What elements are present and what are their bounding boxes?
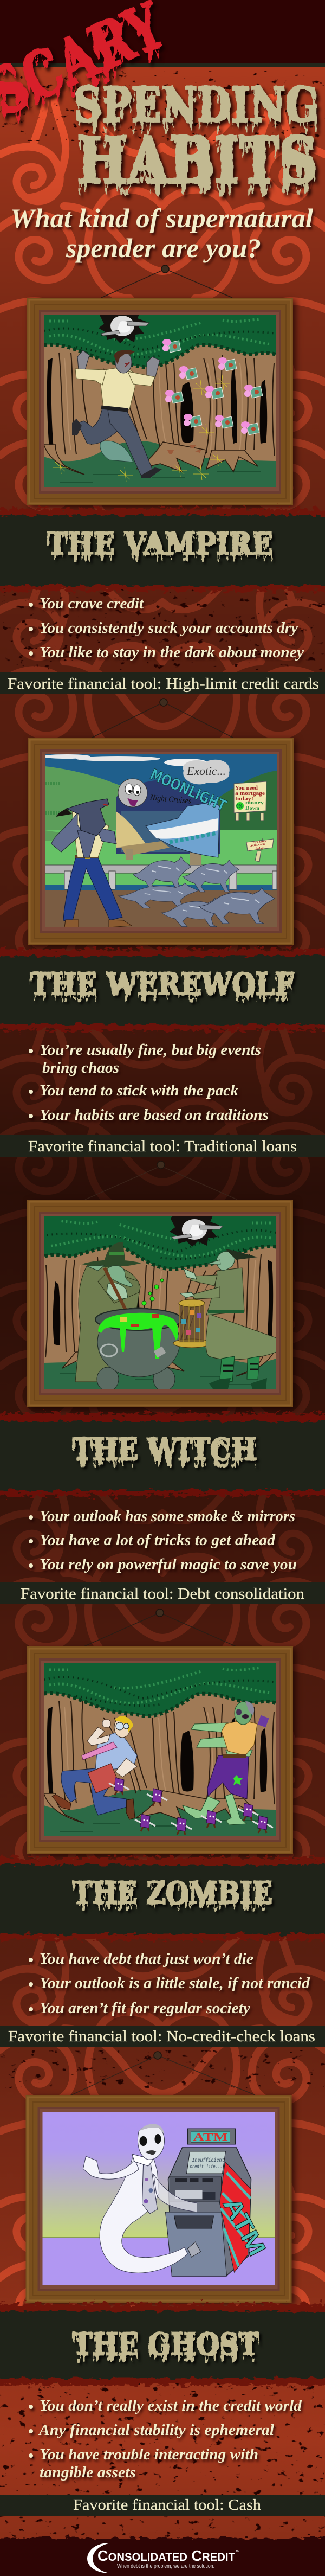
bullet list: ghost: You have trouble interacting with (40, 2446, 258, 2463)
heading: the vampire: THE VAMPIRE (47, 526, 273, 562)
card cage (173, 1299, 210, 1348)
icon: moon (170, 1213, 223, 1247)
ATM machine: Insufficient (192, 2157, 224, 2164)
subtitle: spender are you? (66, 233, 261, 263)
mushrooms (167, 445, 202, 454)
billboard: moonlight cruise (116, 760, 230, 865)
blood splatter behind band: werewolf (0, 949, 325, 1030)
bullet list: vampire: You consistently suck your accounts dry (40, 619, 298, 637)
bullet list: werewolf: bring chaos (42, 1059, 119, 1076)
bullet list: werewolf: Your habits are based on traditions (40, 1106, 269, 1124)
bullet list: witch (29, 1508, 297, 1573)
sign: mortgage: Down (245, 806, 260, 811)
ATM machine: credit life... (190, 2164, 222, 2170)
favorite tool bar: werewolf (0, 1135, 325, 1157)
favorite tool bar: ghost (0, 2495, 325, 2516)
ghost figure (83, 2124, 200, 2273)
bullet list: witch: You rely on powerful magic to save you (40, 1556, 297, 1573)
bullet list: ghost (29, 2397, 302, 2481)
sign: mortgage (234, 781, 266, 821)
favorite tool bar: witch (0, 1582, 325, 1604)
framed picture: vampire (27, 298, 293, 505)
framed picture: zombie (27, 1646, 293, 1854)
sign: mortgage: You need (235, 785, 258, 791)
blood splatter behind band: vampire (0, 509, 325, 591)
band: zombie (0, 1865, 325, 1934)
logo: Consolidated Credit (87, 2543, 239, 2573)
sign: credit card: Get a new (253, 840, 267, 844)
bullet list: zombie (29, 1950, 310, 2017)
subtitle (10, 203, 313, 263)
witch with cage (180, 1249, 276, 1389)
zombie (183, 1701, 269, 1825)
witch stirring (75, 1242, 141, 1382)
billboard: moonlight cruise: Exotic... (186, 764, 226, 778)
logo: Consolidated Credit: CONSOLIDATED CREDIT (98, 2547, 235, 2564)
bullet list: ghost: You don’t really exist in the credit world (40, 2397, 302, 2414)
wall and floor (42, 2112, 275, 2285)
sign: mortgage: money (245, 800, 264, 806)
blood splatter behind band: witch (0, 1413, 325, 1496)
bullet list: zombie: You aren’t fit for regular society (40, 2000, 250, 2017)
road and guardrail (45, 865, 277, 927)
bullet list: vampire (29, 595, 304, 661)
heading: the witch: THE WITCH (73, 1432, 257, 1468)
icon: moon (99, 310, 150, 343)
logo: Consolidated Credit: When debt is the problem, we are the solution. (117, 2563, 214, 2569)
sky and hills (43, 754, 277, 927)
billboard: moonlight cruise: MOONLIGHT (147, 765, 229, 815)
bullet list: witch: You have a lot of tricks to get ahead (40, 1531, 275, 1549)
bullet list: werewolf: You tend to stick with the pack (40, 1082, 239, 1099)
heading: the ghost: THE GHOST (73, 2327, 259, 2362)
bullet list: vampire: You like to stay in the dark about money (40, 644, 304, 661)
sign: credit card: credit card (250, 843, 265, 848)
bullet list: vampire: You crave credit (40, 595, 144, 612)
bullet list: werewolf: You’re usually fine, but big events (40, 1041, 261, 1059)
blood splatter behind band: zombie (0, 1857, 325, 1940)
billboard: moonlight cruise: Night Cruises (150, 793, 192, 806)
cauldron (95, 1279, 182, 1391)
bullet list: ghost: tangible assets (40, 2464, 136, 2481)
favorite tool bar: ghost: Favorite financial tool: Cash (73, 2496, 262, 2514)
sign: credit card (246, 838, 274, 862)
heading: the werewolf: THE WEREWOLF (30, 966, 294, 1002)
footer band (0, 2538, 325, 2576)
pond (100, 441, 133, 462)
ATM machine: ATM (193, 2131, 228, 2143)
sign: mortgage: today! (235, 796, 253, 802)
werewolf figure (51, 799, 132, 927)
walking purple cards (109, 1778, 273, 1835)
bullet list: witch: Your outlook has some smoke & mirrors (40, 1508, 295, 1525)
framed picture: ghost (26, 2095, 291, 2303)
picture hanger: zombie (84, 1609, 236, 1646)
band: vampire (0, 515, 325, 586)
favorite tool bar: vampire: Favorite financial tool: High-limit credit cards (8, 675, 319, 693)
sign: mortgage: a mortgage (235, 791, 265, 797)
top dark header band (0, 0, 325, 63)
band: witch (0, 1421, 325, 1490)
flying credit-card butterflies (162, 339, 263, 435)
sign: mortgage: 0% (236, 804, 243, 809)
running man (52, 1716, 137, 1819)
logo: Consolidated Credit: TM (236, 2550, 239, 2553)
picture hanger: werewolf (92, 699, 233, 738)
band: ghost (0, 2311, 325, 2378)
picture hanger: vampire (101, 265, 232, 298)
favorite tool bar: werewolf: Favorite financial tool: Traditional loans (28, 1138, 297, 1155)
picture hanger: witch (85, 1161, 237, 1200)
divider line under header (0, 63, 325, 67)
framed picture: witch (27, 1200, 293, 1407)
heading: the zombie: THE ZOMBIE (73, 1875, 272, 1911)
sign: credit card: Today!!! (255, 847, 267, 851)
ATM machine: ATM (218, 2192, 272, 2260)
bullet list: ghost: Any financial stability is ephemeral (38, 2421, 275, 2439)
ATM machine (166, 2129, 272, 2276)
bullet list: werewolf (29, 1041, 269, 1124)
favorite tool bar: zombie: Favorite financial tool: No-credit-check loans (8, 2028, 315, 2045)
blood splatter behind band: ghost (0, 2304, 325, 2385)
favorite tool bar: witch: Favorite financial tool: Debt consolidation (21, 1585, 305, 1603)
vampire figure (72, 350, 162, 478)
picture hanger: ghost (72, 2052, 255, 2095)
subtitle: What kind of supernatural (10, 203, 313, 233)
framed picture: werewolf (28, 738, 294, 945)
band: werewolf (0, 956, 325, 1024)
bullet list: zombie: You have debt that just won’t die (40, 1950, 253, 1968)
bullet list: zombie: Your outlook is a little stale, if not rancid (40, 1975, 310, 1992)
wolf pack (118, 856, 275, 927)
sparkles (53, 375, 230, 482)
